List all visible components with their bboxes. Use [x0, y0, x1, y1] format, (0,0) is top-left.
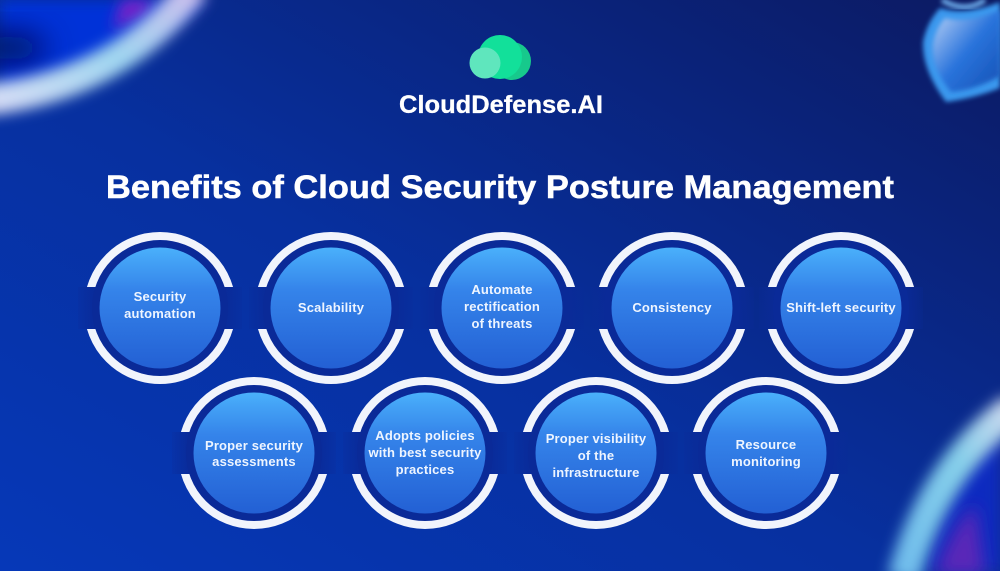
benefit: Resource monitoring	[684, 381, 848, 525]
benefit: Automate rectification of threats	[420, 236, 584, 380]
benefit: Security automation: automation	[124, 306, 196, 321]
benefit: Proper security assessments: assessments	[212, 454, 296, 469]
benefit: Resource monitoring: monitoring	[731, 454, 801, 469]
logo: cloud icon	[470, 35, 531, 80]
benefit: Scalability	[249, 236, 413, 380]
benefit: Proper visibility of the infrastructure: Proper visibility	[546, 431, 647, 446]
benefit: Proper visibility of the infrastructure: of the	[578, 448, 614, 463]
decorative glow: top left	[0, 0, 205, 100]
benefit: Proper visibility of the infrastructure: infrastructure	[552, 465, 640, 480]
benefit: Automate rectification of threats: of threats	[471, 316, 533, 331]
logo: wordmark: CloudDefense.AI	[399, 91, 603, 119]
benefit: Proper security assessments	[172, 381, 336, 525]
benefit: Automate rectification of threats: rectification	[464, 299, 540, 314]
benefit: Adopts policies with best security practices: Adopts policies	[375, 428, 475, 443]
benefit: Scalability: Scalability	[298, 300, 365, 315]
benefit: Consistency: Consistency	[632, 300, 712, 315]
benefit: Proper visibility of the infrastructure	[514, 381, 678, 525]
benefit: Shift-left security: Shift-left security	[786, 300, 896, 315]
benefit: Adopts policies with best security practices: with best security	[367, 445, 482, 460]
benefit: Adopts policies with best security practices: practices	[396, 462, 454, 477]
benefit: Automate rectification of threats: Automate	[471, 282, 533, 297]
icon: shield	[923, 0, 1000, 102]
benefit: Security automation: Security	[134, 289, 187, 304]
title: Benefits of Cloud Security Posture Management	[106, 169, 894, 205]
benefit: Shift-left security	[759, 236, 923, 380]
benefit: Resource monitoring: Resource	[736, 437, 796, 452]
benefit: Consistency	[590, 236, 754, 380]
decorative glow: bottom right	[903, 408, 1000, 571]
benefit: Security automation	[78, 236, 242, 380]
benefit: Proper security assessments: Proper security	[205, 438, 304, 453]
benefit: Adopts policies with best security practices	[343, 381, 507, 525]
